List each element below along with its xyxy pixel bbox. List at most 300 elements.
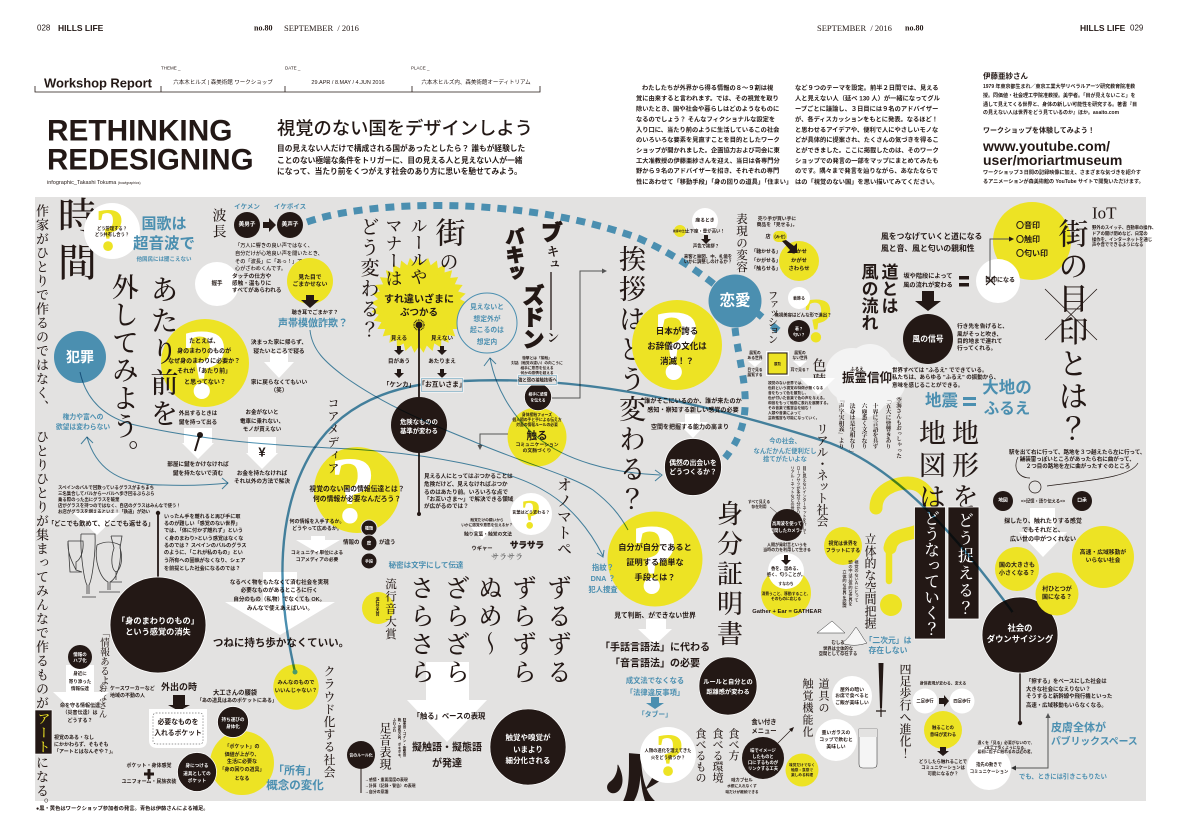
map to oral tradition flow: 広い世の中がつくれない [1010,535,1076,543]
title: Rethinking Redesigning: REDESIGNING [47,144,254,176]
home flow: 寝たいところで寝る [253,347,305,355]
spatial grasp group: 感く、匂うことが。 [767,570,805,578]
speech bubble: directions [1009,448,1147,493]
information lady: （災害伝達）は [62,709,98,716]
food group: 味でイメージ [750,746,777,754]
belongings circle [110,511,206,673]
question circle: bowing culture: 消滅！？ [660,356,694,366]
intro text column 2: のです。隅々まで発言を辿りながら、あなたならで [795,166,938,174]
trend sound award: 流行音大賞 [384,577,397,640]
profile and youtube link: ワークショップ３日間の記録映像に加え、さまざまな気づきを紹介す [983,169,1141,176]
question circle: what is obvious: それが「あたり前」 [177,367,231,375]
pocket group: 入れるポケット [154,728,202,736]
footstep expression: →感情・重要度度の表現 [365,776,408,782]
vertical statement: ひとりひとりが集まってみんなで作るものが [34,430,49,710]
danger circle: 危険なものの [400,416,438,426]
fire group: 人類の進化を理えてきた [645,746,691,754]
four legged walking: コミュニケーションは [921,764,966,770]
question circle: bowing culture [632,290,722,400]
food group: メニュー [751,728,777,734]
question circle: what is obvious: ? [180,308,230,420]
heading: identification: 距離感が変わる [706,688,750,696]
bowing etiquette notes: 座るとき [695,216,715,224]
four legged walking: 意味が変わる [930,730,956,738]
spanish bar glasses note: 三名集合してバルから一バルへ歩き回るぶらぶら [58,490,154,496]
tool tactile function [801,663,886,768]
touch-based expression [412,709,566,785]
map to oral tradition flow: 探したり、触れたりする感覚 [1004,517,1082,525]
fire group: ? [655,722,685,788]
information lady: 寄り添った [69,678,92,684]
vertical statement: アート [36,712,50,754]
big yellow question mark [876,483,931,616]
tool tactile function: ご飯が美味しい [835,698,869,706]
spiritual vibration group [825,344,999,459]
intro text column 1: わたしたちが外界から得る情報の８～９割は視 [642,82,774,92]
expression change group: きかせ [791,248,807,255]
title: Rethinking Redesigning: RETHINKING [47,114,232,148]
heading and lead: になって、当たり前をくつがえす社会のあり方に思いを馳せてみよう。 [277,166,522,176]
real and net society: 今の社会、 [769,436,801,444]
boxed label: mutual [418,378,466,392]
handshake circle: すべてがあらわれる [232,286,281,294]
expression change group: 「触らせる」 [751,264,781,272]
identity group: 手段とは？ [635,572,675,582]
bowing etiquette notes [673,208,732,264]
texture words: zuruzuru etc: ざらざら [442,575,468,687]
callout: desire unchanged: 欲望は変わらない [56,422,110,430]
core media group: 何の情報を入手するか。 [290,518,344,525]
sign language flow: 成文法でなくなる [626,676,684,684]
landmark group: 目印になる [985,276,1015,284]
fashion group: ? [802,284,834,356]
wind group: 目的地まで連れて [957,337,1003,345]
handshake circle: 握手 [211,279,223,287]
synesthesia group: 色彩という視覚の特徴が無くなる [768,385,824,390]
text: loss of personal belongings: のように、「これが私のもの」とい [164,549,243,556]
core media group: 情報の [343,538,360,546]
tool tactile function: 美味しい [826,742,846,750]
real and net society: ローブサツが多分で分かりやすい [796,466,802,526]
four legged walking: 二足歩行 [916,698,934,704]
title: Rethinking Redesigning: infographic_Takashi Tokuma (bowlgraphics) [47,180,141,186]
boxed label: contact skill: 強と弱の接触技術へ [518,376,558,384]
text: bumping is natural: るのはあたり前。いろいろな点で [424,488,508,496]
spatial grasp group: すべて見える [748,499,770,504]
spatial grasp group: 視覚のないＡにとって [854,559,860,602]
core media group: どうやって広めるか。 [292,525,342,532]
real and net society [754,423,829,534]
what is art note: にかかわらず、そもそも [54,741,108,748]
touch-based expression: 触覚や嗅覚が [506,732,551,742]
pocket group: 生活に必要な [227,758,257,765]
heading: terrain and maps: どうなっていく？ [922,510,938,636]
shared things arrow: なるべく物をもたなくて済む社会を実現 [230,578,329,586]
footstep expression: 音のルール化 [349,752,373,758]
page header right: HILLS LIFE [1080,23,1126,33]
wavelength group: その「波長」に「あっ！」て [235,257,302,265]
four legged walking: どうしたら触れることで [919,758,968,764]
crime circle: 犯罪 [66,349,94,365]
page header left: no.80 [254,24,272,32]
wavelength group: 「万人に響きの良い声ではなく、 [235,241,313,249]
heading: terrain and maps: 地形を [948,419,978,515]
information lady: 情報伝達 [71,684,89,692]
onomatopoeia group: サラサラ [510,540,544,550]
heading and lead: 目の見えない人だけで構成される国があったとしたら？ 誰もが経験した [277,142,525,152]
pocket group: 「あの道具はあのポケットにある」 [197,697,277,704]
expression change group: 店 [765,233,771,240]
synesthesia group: 展覧 [774,361,782,366]
expression change group: さわらせ [788,265,810,272]
identity group: 犯人捜査 [588,584,618,594]
heading: take off the obvious [108,273,178,468]
bowing etiquette notes: 声色で挨拶？ [693,242,719,250]
bowing etiquette notes: 来客と廊図、中、礼儀を [684,252,732,260]
footstep expression [347,717,416,794]
real and net society: なんだかんだ便利だし [754,446,816,454]
spatial grasp group: 存在利用 [751,504,767,509]
blue ring: unexpected: 想定外が [473,314,501,322]
belongings circle: 「身のまわりのもの」 [117,616,199,626]
information lady [53,628,155,724]
text: bumping is natural: 「お互いさま～」で解決できる領域 [424,495,514,503]
synesthesia group: ある世界 [747,355,763,360]
wavelength group [210,202,324,272]
touch group: 個人間の手と手による伝え方 [512,417,562,422]
sign language flow: 見て判断、ができない世界 [614,610,696,620]
home flow: （笑） [270,386,288,394]
information lady: ケースワーカーなど [110,685,155,692]
map to oral tradition flow: 口承 [1077,496,1087,504]
heading: terrain and maps: 地図は [915,419,946,515]
speech bubble: directions: ２つ目の路地を左に曲がったすぐのところ [1026,462,1130,470]
boxed label: mutual: 「お互いさま」 [418,380,466,388]
yellow circles: smaller society: いらない社会 [1086,556,1121,564]
text: loss of personal belongings: るのが難しい「感覚のない世界」 [164,520,240,527]
intro text column 1: 性にあわせて「移動手段」「身の回りの道具」「住まい」 [636,176,792,186]
starburst: bumping into each other: すれ違いざまに [384,292,454,306]
fashion group: 無視美容はどんな形で進出？ [774,312,832,318]
landmark group [976,202,1071,303]
callout: skin as public space: 皮膚全体が [1051,720,1106,734]
fire group: 火 [601,751,675,833]
dashed link love to fashion [756,312,786,337]
spiritual vibration group: 法身は是実相なり」 [848,402,855,455]
appearance circle: 見た目で [298,273,322,281]
expression change group: 商品を「見せる」。 [757,220,797,228]
synesthesia group [747,350,835,420]
heading: identification [699,500,757,715]
touch-based expression: 細分化される [506,754,550,764]
profile and youtube link: るアニメーションが森美術館の YouTube サイトで閲覧いただけます。 [983,178,1144,185]
food group: 食い付き [751,716,777,726]
food group: 楽しめる料理 [791,772,813,777]
map to oral tradition flow [993,491,1092,557]
shared things arrow: つねに持ち歩かなくていい。 [213,636,349,649]
onomatopoeia group: いかに感覚や意思を伝えるか？ [461,522,513,527]
heading: rules and manners: どう変わる？ [358,217,379,340]
text: rubbing society: そうすると新幹線や飛行機といった [1026,692,1112,700]
appearance circle: 声帯模倣詐欺？ [278,316,348,330]
cloud society heading: クラウド化する社会 [322,665,336,778]
core media group: 種類 [365,524,373,530]
pocket group: ユニフォーム・民族衣装 [122,778,176,785]
footnote: ●黒・黄色はワークショップ参加者の発言。青色は伊藤さんによる補足。 [36,804,209,812]
heading: terrain and maps [914,419,979,639]
danger circle: 基準が変わる [400,426,438,434]
yellow circles: smaller society [995,526,1134,591]
yellow circles: smaller society: 小さくなる？ [999,569,1035,577]
four legged walking: 身体表現が変わる、変える [920,680,966,686]
profile and youtube link: 授。同価値・社会理工学院准教授。美学者。「目が見えないこと」を [983,92,1136,99]
concept of ownership: 概念の変化 [266,778,324,792]
blue ring: unexpected: 見えないと [470,302,504,310]
text: loss of personal belongings: く身のまわり>という感覚はなくな [164,535,243,542]
spatial grasp group: 立体的な空間把握 [863,532,877,629]
food group: したものと [752,752,774,760]
text: loss of personal belongings: るのでは？ スペインのバルのグラス [164,542,246,549]
IoT note: IoT [1092,204,1117,222]
home flow: 家に戻らなくてもいい [251,378,307,386]
downsizing circle: ダウンサイジング [987,634,1054,644]
handshake circle: 感触・温もりに [232,279,272,287]
landmark group: 〇匂い印 [1016,248,1048,258]
food group: 水銀に入れなくず [727,783,757,788]
spatial grasp group: フラットにする [826,546,860,554]
core media group: コアメディアの必要 [296,556,338,562]
question circle: management: どう管理する？ [97,224,127,232]
expression change group: (みせ) [774,234,786,240]
pocket group [122,681,277,795]
texture words: zuruzuru etc: さらさら [406,575,434,687]
text: loss of personal belongings: う所有への固執がなくなり、シェア [164,557,245,564]
touch-based expression: 「触る」ベースの表現 [413,712,486,720]
expression change group: 「かがせる」 [751,256,781,264]
synesthesia group: 展覧の [749,350,761,355]
wavelength group: イケボイス [274,202,306,210]
synesthesia group: 視覚のない世界では、 [768,380,805,385]
expression change group: かがせ [791,256,807,264]
information lady: 情報の [73,650,87,658]
blue ring: unexpected: 起こるのは [470,324,504,334]
sign language flow: 「法律違反事項」 [626,688,684,696]
page header right: SEPTEMBER / 2016 [817,23,892,33]
intro text column 1: 覚に由来すると言われます。では、その視覚を取り [636,93,779,102]
spatial grasp group: 視覚は世界を [828,540,858,546]
crime circle [54,331,106,383]
wind group: 風の信号 [912,334,944,344]
pocket group: ポケット・身体感覚 [126,762,172,769]
intro text column 2: と思わせるアイデアや、便利で人にやさしいモノな [795,124,938,134]
profile and youtube link: 通して見えてくる世界と、身体の新しい可能性を研究する。著書『目 [983,101,1137,108]
money flow: 電車に乗れない、 [240,417,284,425]
expression change group: 表現の変容 [735,212,748,273]
callout: skin as public space: パブリックスペース [1051,734,1138,748]
spanish bar glasses note: スペインのバルで回数っているグラスがまちまち [58,484,154,490]
question circle: what is obvious: なぜ身のまわりに必要か？ [168,357,240,365]
appearance circle: 聴き耳でごまかす？ [292,308,338,316]
spatial grasp group: 立体的な世界を認識 [842,569,848,609]
tool tactile function: 屋外の暗い [840,686,864,692]
handshake circle: タッチの仕方や [232,272,272,280]
heading: identification: 身分証明書 [714,500,742,650]
profile and youtube link: www.youtube.com/ [982,138,1110,154]
text: loss of personal belongings: いったん手を離れると再び手に取 [164,513,241,520]
wavelength group: 自分だけが心地良い声を聞いたとき、 [235,249,323,257]
chance meeting group: 誰がそこにいるのか、誰が来たのか [644,396,742,404]
expression change group: 「聴かせる」 [751,248,781,254]
map to oral tradition flow: 地図 [998,496,1008,504]
fingertip communication: コミュニケーション [970,768,1009,774]
identity group: DNA ？ [591,574,615,582]
thick dashed arc to love circle [307,205,715,285]
touch group [478,268,607,466]
touch group: 触る [526,429,548,442]
touch group: 対話（触覚の違い）の向こうに [511,360,563,365]
wind group [858,230,1008,364]
page header right [817,23,1144,33]
money flow [234,408,290,485]
heading: terrain and maps: どう捉える？ [956,512,974,617]
title: Rethinking Redesigning [47,114,254,186]
core media group: コアメディア [326,397,340,475]
workshop report bar: THEME _ [161,66,181,70]
bowing etiquette notes: 挨拶の仕方 [673,229,687,233]
four legged walking: 四足歩行 [953,698,971,704]
spiritual vibration group: 空海さんもおっしゃった [895,396,902,459]
seen / unseen flow: 見える [391,335,407,342]
fire group [607,727,696,801]
synesthesia group: 展覧の [794,350,806,355]
onomatopoeia bukyun zudon bakit: キュ [545,245,559,270]
touch group: を伝える [530,398,546,402]
touch-based expression: が発達 [432,756,462,770]
onomatopoeia group: 言葉はどう変わる？ [512,508,550,516]
bowing etiquette notes: 上下座・畳が高い！ [685,228,725,234]
equation: earthquake is vibration: 大地の [982,378,1032,397]
pocket group: 大工さんの腰袋 [213,688,258,696]
expression change group [735,212,819,281]
callout: ultrasonic anthem: 国歌は [141,214,187,232]
spatial grasp group: 消費うこと、移動すること、 [761,591,811,596]
workshop report bar: 六本木ヒルズ | 森美術館 ワークショップ [173,78,273,86]
starburst: bumping into each other: ぶつかる [400,308,438,318]
money flow: ¥ [258,444,266,460]
spatial grasp group [748,499,912,656]
callout: ultrasonic anthem [133,214,195,263]
question circle: what is obvious: たとえば、 [189,337,219,345]
synesthesia group: 音をもって色を展覧し、 [768,390,808,395]
shared things arrow [213,572,349,710]
information lady: 命を守る情報伝達 [60,702,100,709]
wavelength group: 美男子 [239,220,256,228]
IoT note: 声や音でできるようになる [1092,240,1143,248]
heading and lead: 視覚のない国をデザインしよう [277,118,533,138]
spiritual vibration group: 「五大に皆響きあり [884,397,891,451]
chance meeting group: 空間を把握する能力の高まり [651,423,729,431]
food group: リンクする工夫 [748,764,779,772]
what is art note: 視覚のある・なし [54,734,94,741]
core media group: コミュニティ単位による [291,548,343,556]
sign language flow [600,610,710,718]
core media group: 度 [367,540,372,546]
spanish bar glasses note [48,484,182,535]
seen / unseen flow: 「ケンカ」 [383,380,415,388]
sign language flow: 「音言語法」の必要 [610,656,700,670]
home flow [251,338,307,394]
spatial grasp group: Gather + Ear = GATHEAR [752,609,823,615]
touch-based expression: 擬触語・擬態語 [412,740,482,754]
core media group: 手段 [365,558,373,564]
heading: take off the obvious: あたり前を [146,275,178,430]
identity group: 証明する簡単な [626,556,684,566]
heading: time: 時間 [52,196,96,288]
landmark group: 〇触印 [1016,234,1040,244]
shared things arrow: みんなで使えあえばいい。 [247,604,313,612]
heading: rules and manners: マナーは [382,217,402,287]
vertical statement: 作家がひとりで作るのではなく、 [34,204,49,414]
onomatopoeia bukyun zudon bakit: バキッ [502,227,524,281]
downsizing circle [982,572,1078,725]
shared things arrow: いいんじゃない？ [275,687,317,694]
callout: skin as public space: でも、ときには引きこもりたい [1019,772,1107,780]
spatial grasp group: 香を、温める、 [771,564,801,572]
texture words: zuruzuru etc: ずるずる [544,575,570,687]
vertical statement: になる。 [34,756,49,812]
spiritual vibration group: 『声字実相義』より [837,397,844,451]
spiritual vibration group: 振霊信仰 [842,370,892,385]
synesthesia group: 展覧する [747,372,763,377]
food group: 味だけが継続できる [725,789,759,794]
what is art note: 「アートとはなんぞや？」。 [54,748,116,755]
synesthesia group: 耳で見る？ [791,367,809,372]
fashion group: ファッション [766,290,778,343]
spatial grasp group: 当時の力を利用して生きる [763,546,811,552]
profile and youtube link [982,70,1144,185]
equation: earthquake is vibration [925,378,1032,418]
workshop report bar [35,66,540,92]
callout: desire unchanged: 権力や富への [63,412,104,420]
love circle [708,274,762,328]
text: loss of personal belongings: を前提とした社会になるのでは？ [164,565,240,572]
question circle: management [84,197,140,263]
fire group: 火をどう扱うか？ [651,754,685,760]
fashion group: 着？ [795,324,803,330]
core media group: 秘密は文字にして伝達 [389,560,464,570]
pocket group: 「ポケット」の [224,743,260,750]
seen / unseen flow: あたりまえ [428,357,456,365]
heading: identification: ルールと自分との [703,678,753,686]
page header left: 028 [37,24,51,32]
concept of ownership [266,763,324,792]
heading: take off the obvious: 外してみよう。 [108,273,138,468]
identity group: ? [630,504,680,614]
real and net society: リアル・ネットなどの世界 [790,466,796,515]
touch group: 相手に感情 [529,392,548,396]
shared things arrow: 必要なものがあるところに行く [241,586,318,594]
key flow: 鍵を持って出る [179,418,217,426]
wind group: 坂や階段によって [903,272,953,280]
pocket group: となる [235,775,249,782]
information lady: おばさん [98,684,108,718]
text: loss of personal belongings [164,513,248,572]
intro text column 1: のいろいろな要素を見直すことを目的としたワーク [636,134,780,144]
intro text column 1: 工大准教授の伊藤亜紗さんを迎え、当日は各専門分 [636,156,780,164]
fashion group [766,284,834,356]
footstep expression: →自分の意識 [365,788,388,794]
downsizing circle: 社会の [1008,623,1032,633]
